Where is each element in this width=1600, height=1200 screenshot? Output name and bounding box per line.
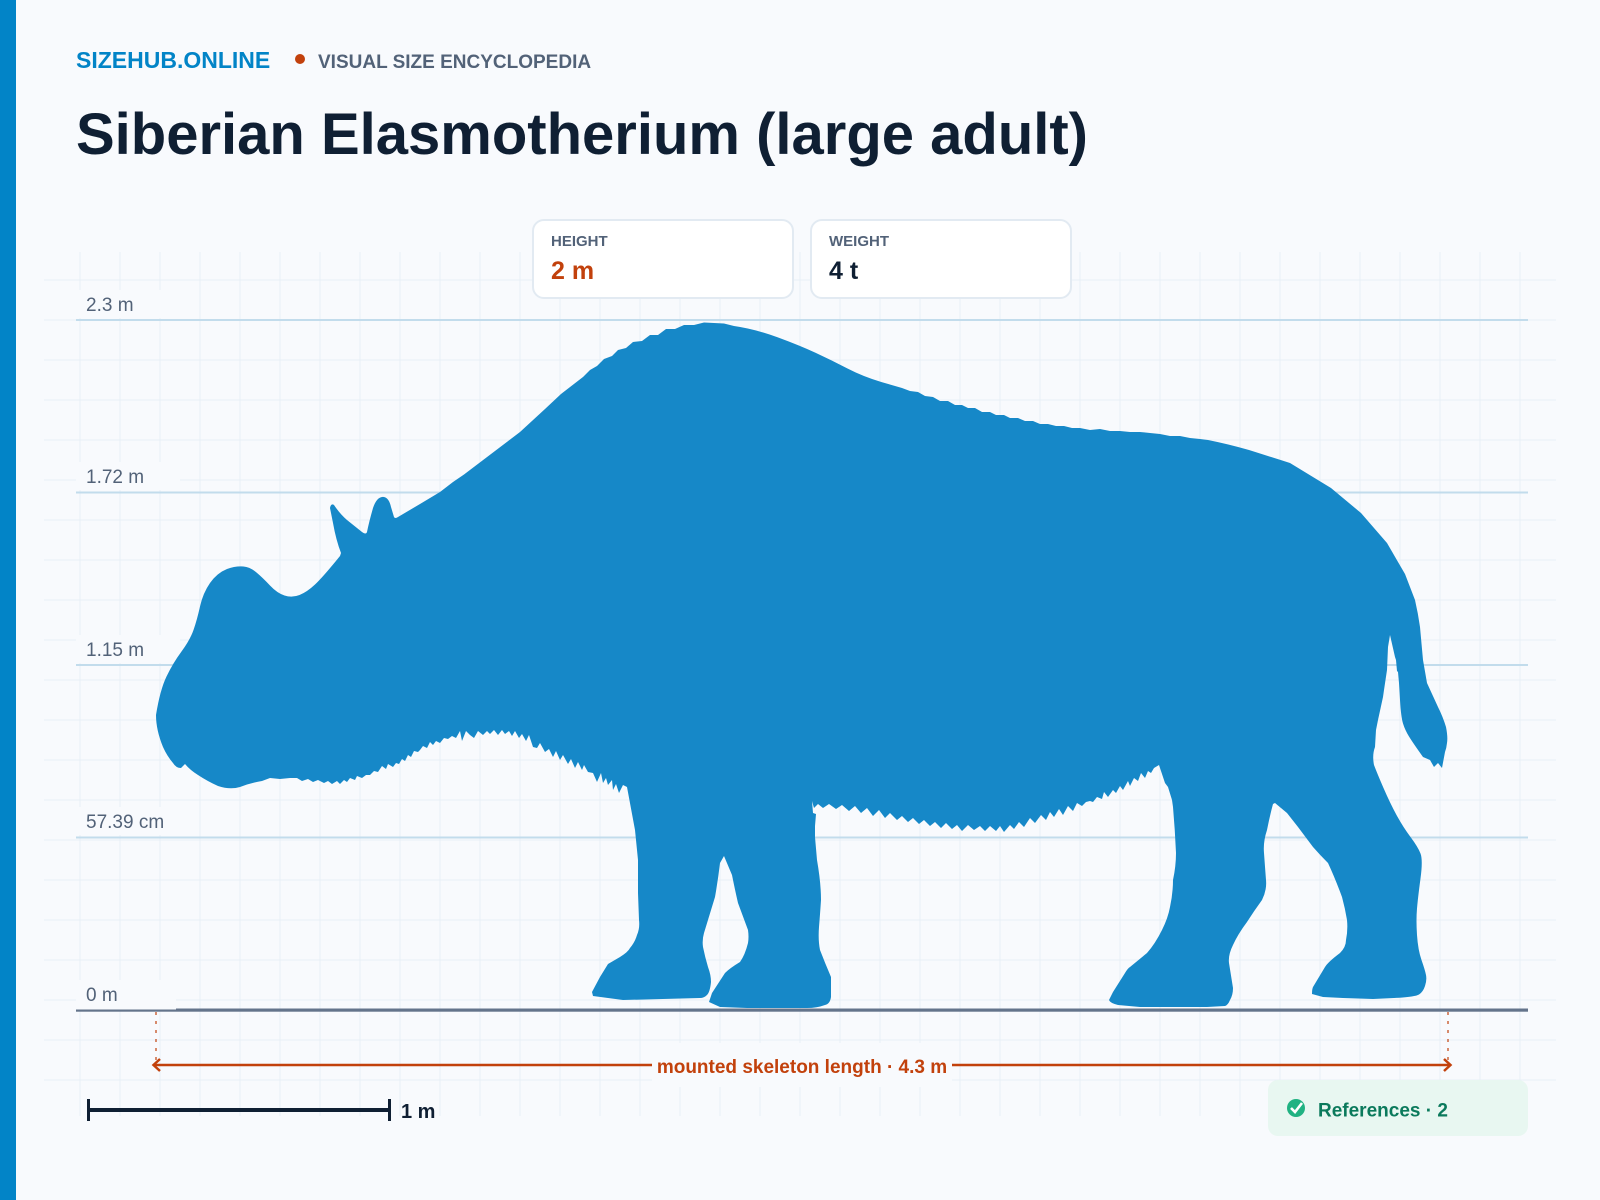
ground line	[76, 1008, 1528, 1012]
accent bar	[0, 0, 16, 1200]
card: weight	[811, 220, 1071, 298]
scale bar: 1 m	[401, 1101, 435, 1123]
scale bar	[87, 1099, 435, 1123]
card: weight: WEIGHT	[829, 233, 889, 250]
animal silhouette: elasmotherium	[156, 322, 1447, 1008]
height axis labels	[86, 295, 164, 1006]
references badge: References · 2	[1318, 1100, 1448, 1122]
tagline: VISUAL SIZE ENCYCLOPEDIA	[318, 52, 591, 73]
length label: mounted skeleton length · 4.3 m	[657, 1057, 947, 1078]
height axis labels: 57.39 cm	[86, 812, 164, 833]
card: height: 2 m	[551, 257, 594, 285]
header	[76, 47, 591, 73]
height axis labels: 0 m	[86, 985, 118, 1006]
height axis labels: 1.15 m	[86, 640, 144, 661]
separator dot	[295, 54, 305, 64]
references badge	[1268, 1080, 1528, 1136]
card: weight: 4 t	[829, 257, 859, 285]
icon: check circle	[1287, 1099, 1305, 1117]
brand name: SIZEHUB.ONLINE	[76, 47, 270, 73]
card: height: HEIGHT	[551, 233, 608, 250]
card: height	[533, 220, 793, 298]
title: Siberian Elasmotherium (large adult)	[76, 102, 1088, 167]
height axis labels: 1.72 m	[86, 467, 144, 488]
length dimension	[154, 1012, 1450, 1087]
height axis labels: 2.3 m	[86, 295, 134, 316]
